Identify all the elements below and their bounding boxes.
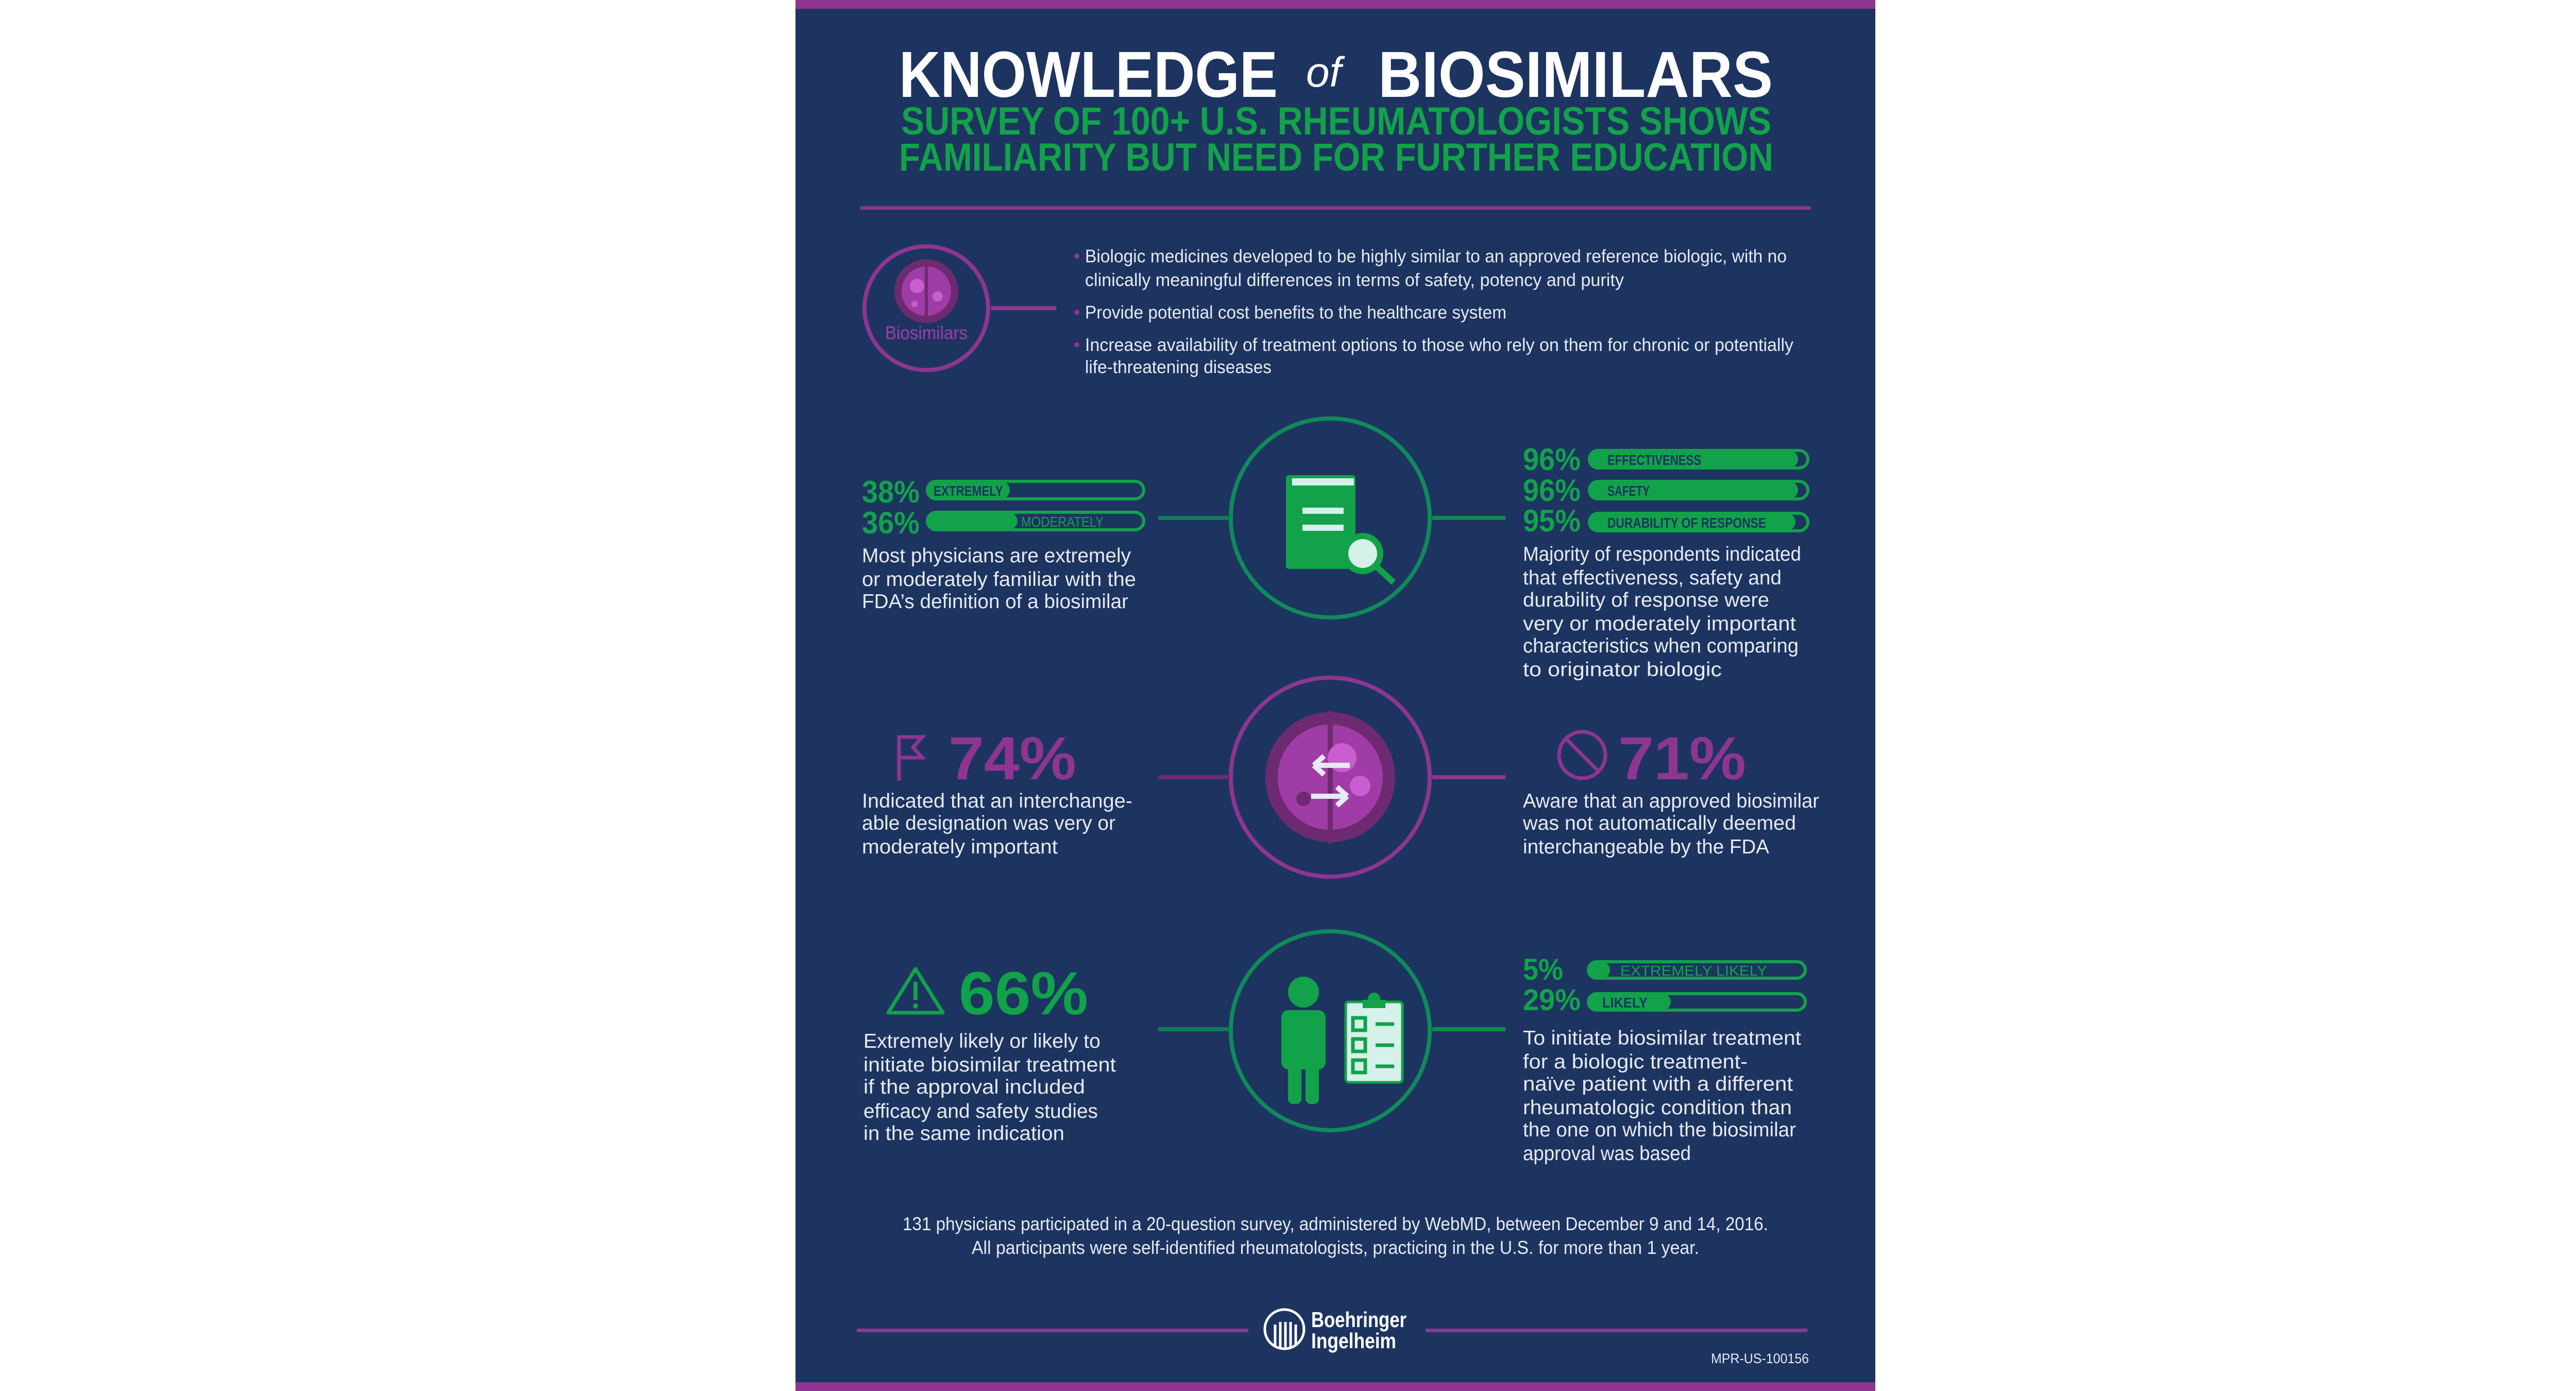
stat: 71%: Aware that an approved biosimilar <box>1523 790 1819 812</box>
stat: 66%: efficacy and safety studies <box>863 1100 1098 1122</box>
text block: characteristics: durability of response were <box>1523 589 1769 611</box>
stat: 74%: able designation was very or <box>862 812 1115 834</box>
chart: familiarity bars: EXTREMELY <box>934 483 1003 499</box>
text block: bullets: clinically meaningful differences in terms of safety, potency and purity <box>1085 270 1624 290</box>
chart: likelihood bars: 5% <box>1523 953 1563 986</box>
text block: bullets <box>1074 246 1793 377</box>
icon: book circle <box>1158 418 1505 617</box>
text block: characteristics: very or moderately important <box>1523 613 1796 635</box>
subtitle: SURVEY OF 100+ U.S. RHEUMATOLOGISTS SHOWS <box>901 99 1771 143</box>
chart: familiarity bars: MODERATELY <box>1021 514 1104 530</box>
chart: characteristics bars: DURABILITY OF RESPONSE <box>1607 515 1766 531</box>
chart: likelihood bars: 29% <box>1523 983 1581 1017</box>
chart: characteristics bars <box>1523 442 1808 538</box>
logo: Boehringer Ingelheim <box>1265 1308 1406 1353</box>
chart: characteristics bars: 96% <box>1523 473 1581 508</box>
text block: characteristics: that effectiveness, safety and <box>1523 567 1782 589</box>
chart: familiarity bars: 38% <box>862 475 920 509</box>
icon: person with clipboard <box>1158 931 1505 1130</box>
text block: characteristics: characteristics when comparing <box>1523 635 1799 657</box>
logo: Boehringer Ingelheim: Boehringer <box>1311 1308 1406 1332</box>
text block: likelihood: the one on which the biosimilar <box>1523 1119 1796 1141</box>
text block: bullets: Provide potential cost benefits to the healthcare system <box>1085 303 1506 323</box>
chart: characteristics bars: 96% <box>1523 442 1581 477</box>
title: of <box>1306 49 1345 96</box>
text block: bullets: Increase availability of treatment options to those who rely on them for chronic or potentially <box>1085 335 1793 355</box>
text block: survey footnote: All participants were self-identified rheumatologists, practicing in the U.S. for more than 1 year. <box>972 1237 1699 1258</box>
title: KNOWLEDGE <box>899 38 1278 111</box>
code: MPR: MPR-US-100156 <box>1711 1351 1809 1366</box>
text block: characteristics: to originator biologic <box>1523 659 1722 681</box>
text block: likelihood: rheumatologic condition than <box>1523 1097 1792 1119</box>
text block: bullets: life-threatening diseases <box>1085 357 1272 377</box>
chart: characteristics bars: EFFECTIVENESS <box>1607 452 1701 468</box>
chart: likelihood bars: LIKELY <box>1602 995 1648 1011</box>
stat: 71%: interchangeable by the FDA <box>1523 836 1769 858</box>
text block: likelihood: naïve patient with a different <box>1523 1073 1793 1095</box>
stat: 66% <box>863 960 1116 1145</box>
text block: familiarity <box>862 545 1136 613</box>
text block: familiarity: or moderately familiar with the <box>862 568 1136 591</box>
chart: likelihood bars <box>1523 953 1805 1017</box>
chart: characteristics bars: 95% <box>1523 504 1581 538</box>
stat: 74%: moderately important <box>862 836 1058 858</box>
icon: biosimilars badge: Biosimilars <box>885 322 968 343</box>
text block: familiarity: Most physicians are extremely <box>862 545 1131 567</box>
stat: 71% <box>1522 725 1819 858</box>
text block: likelihood: for a biologic treatment- <box>1523 1051 1748 1073</box>
chart: familiarity bars: 36% <box>862 506 920 540</box>
stat: 74%: Indicated that an interchange- <box>862 790 1132 812</box>
stat: 66%: if the approval included <box>863 1076 1085 1098</box>
subtitle <box>899 99 1773 179</box>
chart: characteristics bars: SAFETY <box>1607 483 1650 499</box>
title <box>899 38 1773 111</box>
stat: 66%: in the same indication <box>863 1122 1064 1145</box>
logo: Boehringer Ingelheim: Ingelheim <box>1311 1329 1396 1353</box>
text block: characteristics: Majority of respondents indicated <box>1523 543 1801 565</box>
stat: 74% <box>862 725 1132 858</box>
subtitle: FAMILIARITY BUT NEED FOR FURTHER EDUCATION <box>899 136 1773 179</box>
chart: likelihood bars: EXTREMELY LIKELY <box>1620 963 1767 979</box>
stat: 71%: was not automatically deemed <box>1522 812 1796 834</box>
text block: bullets: Biologic medicines developed to be highly similar to an approved reference biologic, with no <box>1085 246 1787 266</box>
icon: cell circle <box>1158 678 1505 877</box>
icon: biosimilars badge <box>865 246 1056 370</box>
stat: 66%: 66% <box>959 960 1088 1028</box>
text block: likelihood: approval was based <box>1523 1143 1691 1165</box>
stat: 71%: 71% <box>1618 725 1746 793</box>
text block: likelihood: To initiate biosimilar treatment <box>1523 1027 1801 1049</box>
stat: 74%: 74% <box>948 725 1076 793</box>
text block: survey footnote: 131 physicians participated in a 20-question survey, administered by WebMD, between December 9 and 14, 2016. <box>903 1213 1768 1234</box>
text block: familiarity: FDA’s definition of a biosimilar <box>862 591 1128 613</box>
panel: background <box>795 0 1875 1391</box>
chart: familiarity bars <box>862 475 1144 540</box>
title: BIOSIMILARS <box>1378 38 1773 111</box>
stat: 66%: Extremely likely or likely to <box>863 1030 1100 1052</box>
text block: characteristics <box>1523 543 1801 681</box>
text block: likelihood <box>1523 1027 1801 1165</box>
text block: survey footnote <box>903 1213 1768 1258</box>
stat: 66%: initiate biosimilar treatment <box>863 1054 1116 1076</box>
